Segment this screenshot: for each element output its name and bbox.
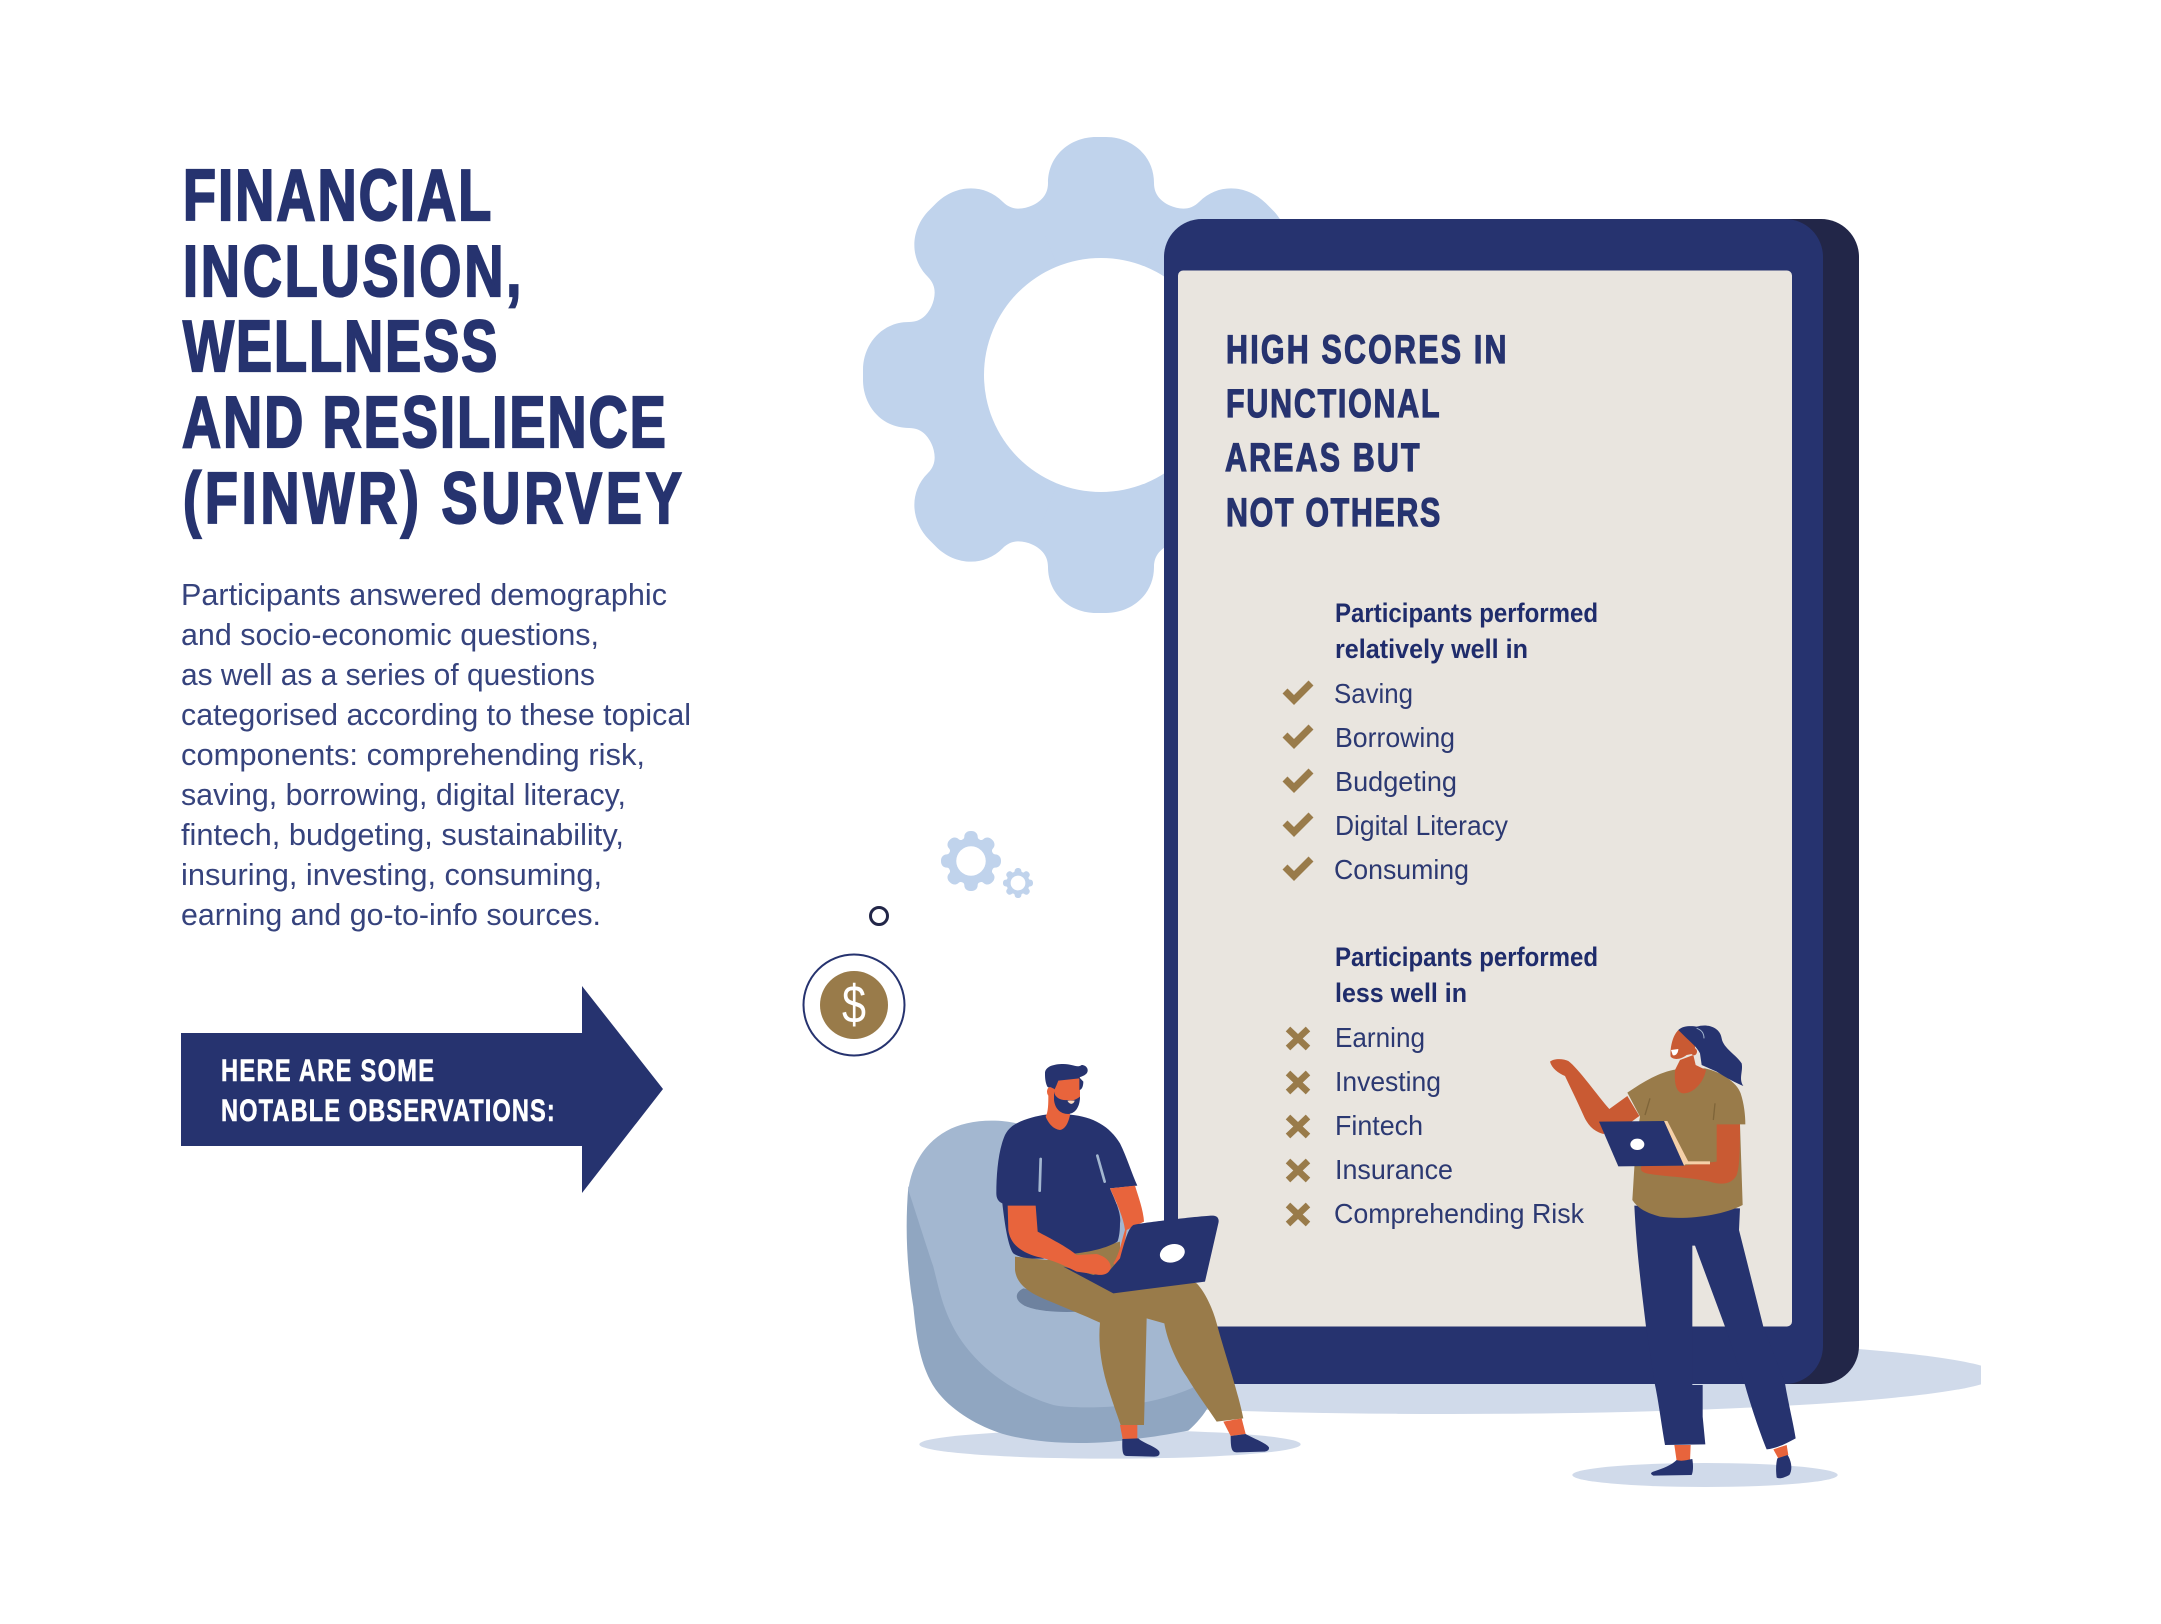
arrow callout: HERE ARE SOME — [221, 1053, 434, 1088]
intro text block: insuring, investing, consuming, — [181, 857, 602, 892]
list: performed well: Digital Literacy — [1335, 810, 1508, 841]
list: performed well: Saving — [1334, 678, 1413, 709]
list: performed less well: Comprehending Risk — [1334, 1198, 1585, 1229]
panel heading: FUNCTIONAL — [1226, 381, 1440, 426]
list: performed well: Consuming — [1334, 854, 1469, 885]
icon: small gear — [941, 831, 1001, 891]
title: INCLUSION, — [183, 232, 521, 312]
icons: check marks — [1285, 683, 1311, 876]
intro text block: Participants answered demographic — [181, 577, 667, 612]
tablet screen — [1178, 270, 1792, 1326]
list: performed well: Borrowing — [1335, 722, 1455, 753]
title: (FINWR) SURVEY — [183, 459, 682, 539]
panel heading: NOT OTHERS — [1226, 490, 1440, 535]
panel heading — [1225, 327, 1506, 535]
list: performed well — [1334, 598, 1598, 885]
icon: dollar coin — [804, 954, 904, 1056]
intro text block: as well as a series of questions — [181, 657, 595, 692]
icons: cross marks — [1288, 1029, 1308, 1224]
intro text block: saving, borrowing, digital literacy, — [181, 777, 626, 812]
list: performed well: Participants performed — [1335, 598, 1598, 628]
arrow callout: NOTABLE OBSERVATIONS: — [221, 1093, 555, 1128]
list: performed less well: less well in — [1335, 978, 1467, 1008]
panel heading: HIGH SCORES IN — [1226, 327, 1506, 372]
icon: dollar coin: $ — [842, 975, 866, 1035]
intro text block: fintech, budgeting, sustainability, — [181, 817, 624, 852]
list: performed well: relatively well in — [1335, 634, 1528, 664]
intro text block — [181, 577, 691, 932]
list: performed less well — [1334, 942, 1598, 1229]
intro text block: categorised according to these topical — [181, 697, 691, 732]
list: performed less well: Earning — [1335, 1022, 1425, 1053]
title: AND RESILIENCE — [182, 383, 666, 463]
icon: small ring — [870, 908, 888, 924]
intro text block: components: comprehending risk, — [181, 737, 645, 772]
title — [182, 156, 682, 539]
list: performed less well: Investing — [1335, 1066, 1441, 1097]
icon: large gear — [863, 137, 1339, 613]
title: WELLNESS — [183, 307, 497, 387]
title: FINANCIAL — [183, 156, 491, 236]
list: performed well: Budgeting — [1335, 766, 1457, 797]
intro text block: and socio-economic questions, — [181, 617, 599, 652]
arrow callout — [181, 986, 663, 1193]
icon: tiny gear — [1003, 868, 1033, 898]
list: performed less well: Participants performed — [1335, 942, 1598, 972]
figure: woman with laptop — [1550, 1025, 1838, 1487]
panel: tablet — [1164, 219, 1859, 1384]
list: performed less well: Fintech — [1335, 1110, 1423, 1141]
tablet floor shadow — [1206, 1349, 1981, 1414]
panel heading: AREAS BUT — [1225, 435, 1420, 480]
list: performed less well: Insurance — [1335, 1154, 1453, 1185]
intro text block: earning and go-to-info sources. — [181, 897, 601, 932]
figure: man on beanbag — [907, 1064, 1301, 1459]
